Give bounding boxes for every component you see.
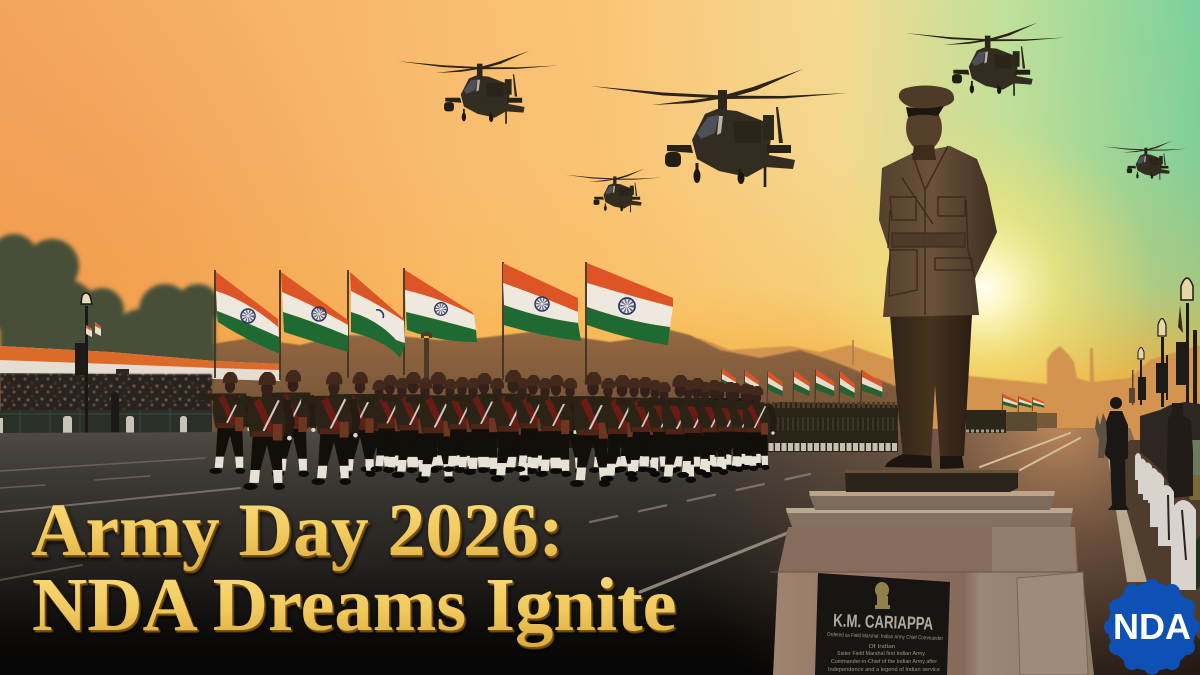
Indian flag 4 [405, 270, 477, 342]
statue belt [892, 233, 965, 247]
road [0, 428, 1200, 675]
statue: K.M. Cariappa [879, 86, 997, 469]
statue head [906, 105, 942, 151]
background officer [1167, 403, 1193, 498]
title: NDA Dreams Ignite [32, 562, 677, 647]
statue trousers [890, 315, 972, 458]
flag poles [215, 262, 586, 380]
Indian flag 3 [350, 272, 405, 358]
title: Army Day 2026: [31, 489, 564, 572]
marching soldiers back rank [352, 378, 767, 474]
distant flags [721, 368, 1044, 413]
officer in dark suit [1105, 397, 1129, 510]
white bollards [1135, 453, 1200, 590]
plaque: K.M. Cariappa [815, 573, 950, 675]
helicopter: small right [1102, 141, 1187, 180]
plaque name: K.M. CARIAPPA [833, 610, 934, 634]
NDA badge [1104, 579, 1200, 675]
lamp behind soldiers [421, 331, 432, 386]
statue uniform details [888, 146, 975, 315]
Indian flag 1 [216, 272, 280, 354]
plaque inscription [827, 632, 943, 673]
statue pedestal [770, 470, 1091, 675]
statue cap [899, 86, 954, 109]
helicopter: upper left [398, 51, 558, 124]
plaque inscription: Ordered as Field Marshal: Indian Army Chief Commander [827, 632, 943, 642]
distant saluting man [1095, 413, 1107, 458]
helicopter: large centre [590, 69, 848, 187]
helicopter: small centre [566, 169, 661, 212]
distant skyline and monument [680, 338, 1200, 440]
tree line [205, 330, 900, 440]
left trees [0, 234, 220, 380]
plaque inscription: Commander-in-Chief of the Indian Army after [831, 659, 937, 665]
statue shoes [885, 454, 964, 469]
marching soldiers front rank [200, 370, 775, 490]
plaque inscription: Sister Field Marshal first Indian Army [837, 651, 925, 657]
far marching platoons [762, 402, 1057, 452]
lamp post left [75, 293, 101, 434]
Indian flag 6 [587, 263, 673, 345]
Indian flag 5 [503, 263, 581, 341]
statue jacket [879, 146, 997, 317]
helicopter: upper right [906, 23, 1066, 96]
plaque inscription: Independence and a legend of Indian service [828, 667, 940, 673]
background sky [0, 0, 1200, 460]
crowd and fence [0, 374, 212, 436]
NDA badge: NDA [1113, 606, 1191, 647]
grandstand wall [0, 346, 280, 381]
plaque inscription: Of Indian [868, 644, 896, 650]
roadside crowd [1140, 402, 1200, 500]
road markings [0, 433, 1092, 675]
plaque emblem [875, 582, 890, 609]
title [31, 489, 677, 647]
street lamps and banners [1129, 278, 1197, 408]
right roadside kerb and pavement [1108, 440, 1200, 640]
Indian flag 2 [281, 272, 348, 352]
